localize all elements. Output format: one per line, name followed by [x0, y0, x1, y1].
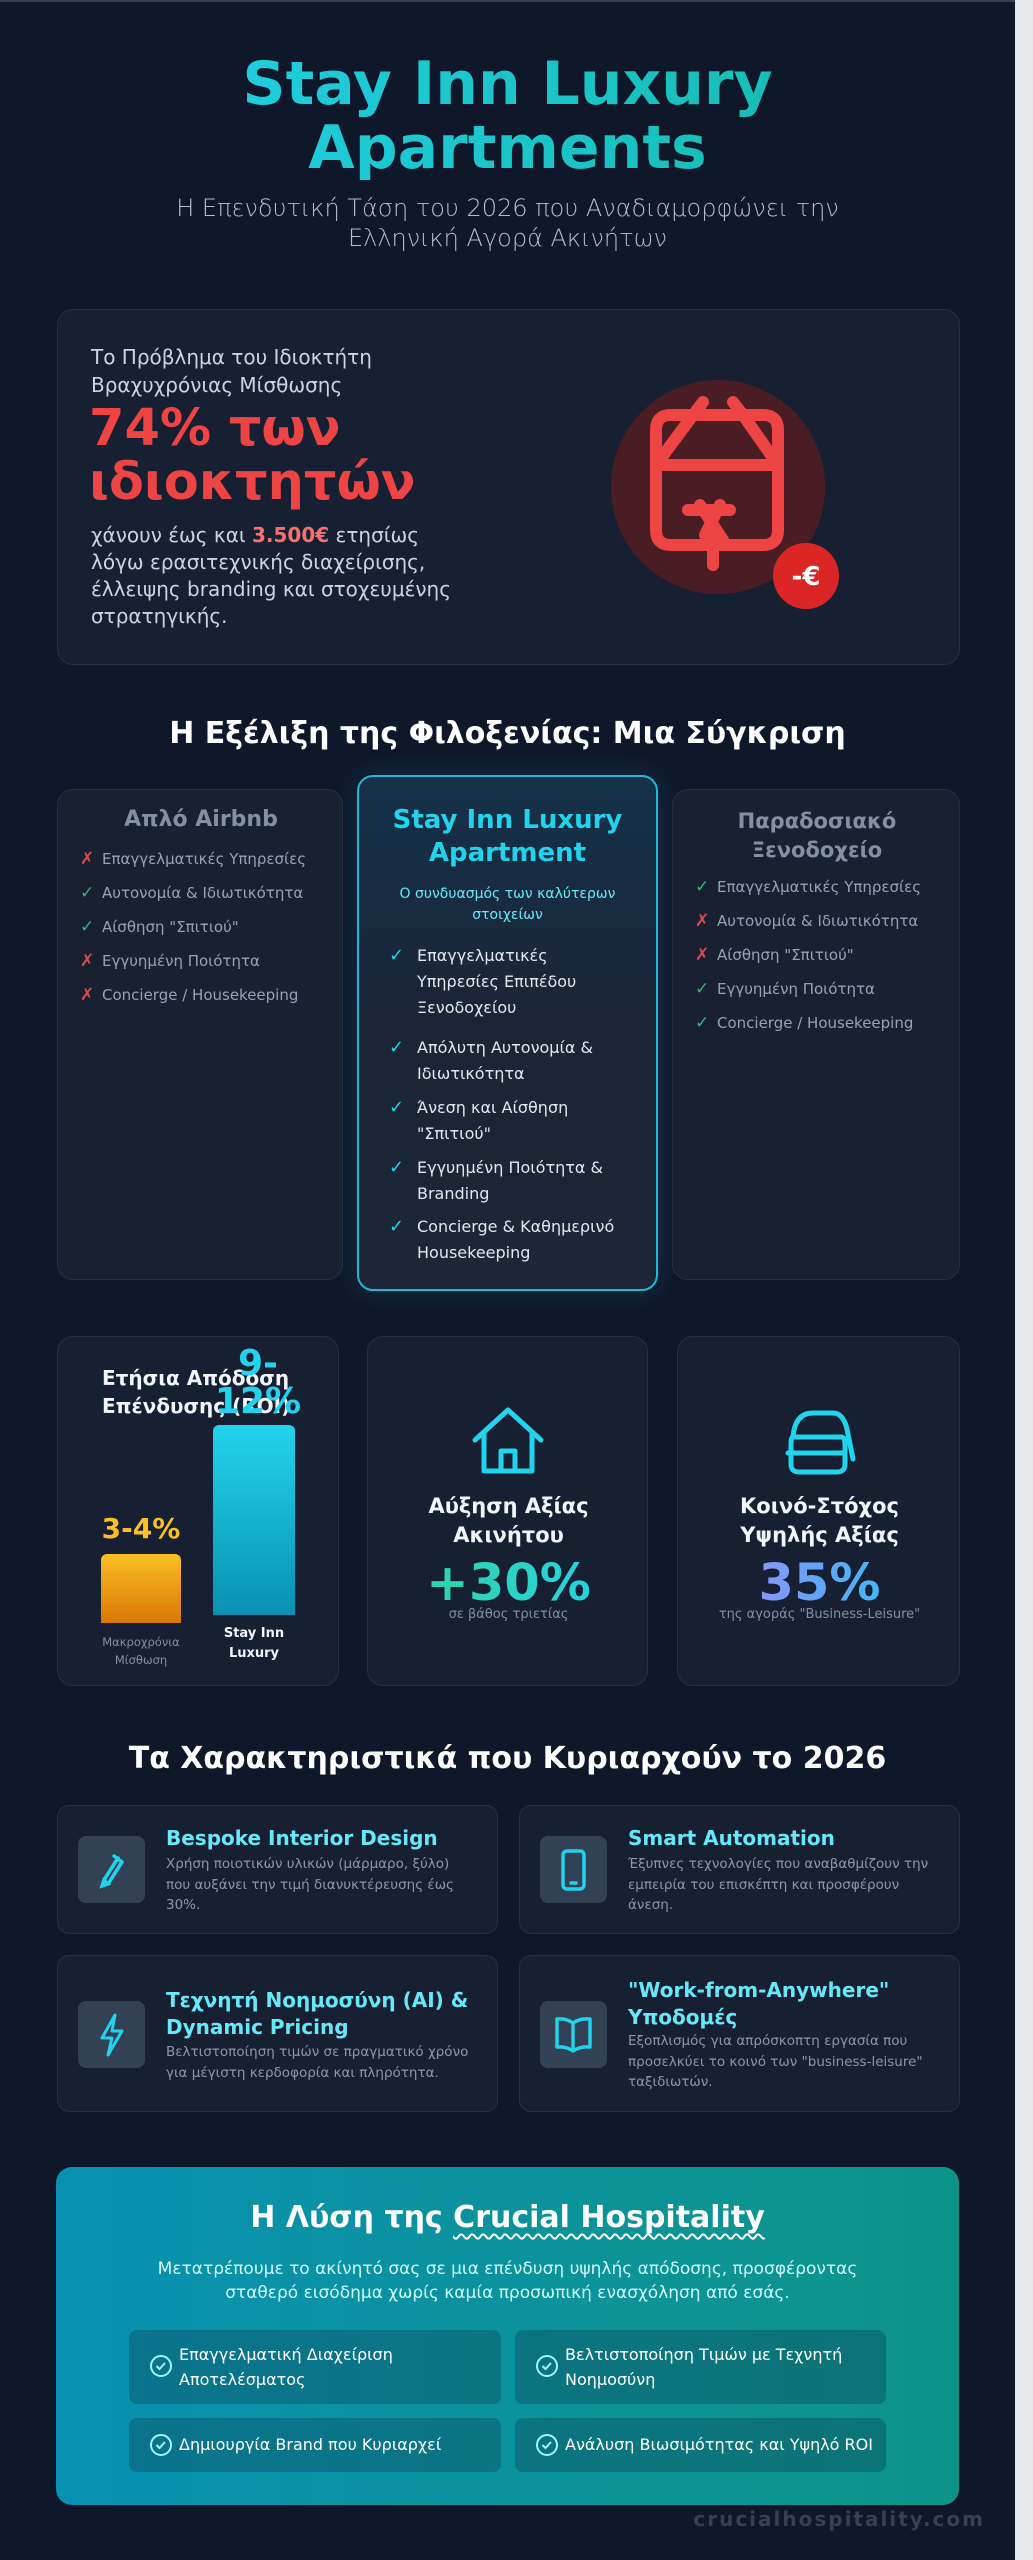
stay inn list: ✓ — [389, 1097, 404, 1118]
stay inn list: Απόλυτη Αυτονομία & — [417, 1038, 593, 1057]
hotel title: Παραδοσιακό — [738, 809, 896, 833]
subtitle — [176, 194, 839, 252]
hotel list: ✗ — [695, 911, 709, 931]
stay inn title: Apartment — [429, 838, 586, 868]
feature: smart automation: εμπειρία του επισκέπτη και προσφέρουν — [628, 1876, 899, 1892]
icon: house — [472, 1407, 544, 1474]
benefit 3 — [129, 2418, 501, 2472]
icon: book — [540, 2001, 607, 2068]
stay inn list: Εγγυημένη Ποιότητα & — [417, 1158, 603, 1177]
airbnb list: ✓ — [80, 883, 94, 903]
hotel list — [695, 877, 921, 1033]
audience caption: της αγοράς "Business-Leisure" — [719, 1607, 920, 1622]
stay inn list: ✓ — [389, 945, 404, 966]
problem text: έλλειψης branding και στοχευμένης — [91, 577, 451, 601]
bar: stay inn — [213, 1343, 301, 1661]
stay inn list: Ξενοδοχείου — [417, 998, 516, 1017]
problem text: λόγω ερασιτεχνικής διαχείρισης, — [91, 550, 425, 574]
feature: work from anywhere: ταξιδιωτών. — [628, 2074, 713, 2090]
feature: bespoke interior: Χρήση ποιοτικών υλικών (μάρμαρο, ξύλο) — [166, 1856, 449, 1872]
benefit 2 — [515, 2330, 886, 2404]
airbnb list: Εγγυημένη Ποιότητα — [102, 952, 260, 970]
title — [0, 52, 1015, 180]
stay inn list: Concierge & Καθημερινό — [417, 1217, 614, 1236]
stay inn subtitle: Ο συνδυασμός των καλύτερων — [400, 886, 615, 902]
hotel list: ✗ — [695, 945, 709, 965]
feature: bespoke interior: 30%. — [166, 1897, 200, 1913]
airbnb list — [80, 849, 306, 1005]
airbnb list: Επαγγελματικές Υπηρεσίες — [102, 850, 306, 868]
benefit 2: Νοημοσύνη — [565, 2370, 655, 2389]
hotel list: ✓ — [695, 877, 709, 897]
hotel list: Αίσθηση "Σπιτιού" — [717, 946, 854, 964]
hotel title — [738, 809, 896, 862]
heading: comparison: Η Εξέλιξη της Φιλοξενίας: Μια Σύγκριση — [169, 716, 846, 751]
audience stat — [678, 1555, 961, 1613]
subtitle: Η Επενδυτική Τάση του 2026 που Αναδιαμορφώνει την — [176, 194, 839, 222]
benefit 1 — [129, 2330, 501, 2404]
icon: calendar loss: -€ — [792, 562, 820, 592]
benefit 2: Βελτιστοποίηση Τιμών με Τεχνητή — [565, 2345, 842, 2364]
value title — [428, 1494, 589, 1547]
stay inn list: Επαγγελματικές — [417, 946, 548, 965]
feature: smart automation: Έξυπνες τεχνολογίες που αναβαθμίζουν την — [628, 1856, 928, 1872]
bar: stay inn: 12% — [215, 1381, 301, 1422]
hotel title: Ξενοδοχείο — [752, 838, 882, 862]
value title: Ακινήτου — [453, 1523, 564, 1547]
value stat — [368, 1555, 649, 1613]
audience title: Υψηλής Αξίας — [740, 1523, 899, 1547]
stay inn subtitle: στοιχείων — [472, 907, 543, 923]
roi title: Ετήσια Απόδοση — [102, 1366, 289, 1390]
hotel list: ✓ — [695, 1013, 709, 1033]
problem text — [91, 523, 451, 628]
feature: work from anywhere: Υποδομές — [628, 2005, 737, 2029]
airbnb list: ✗ — [80, 849, 94, 869]
airbnb list: Concierge / Housekeeping — [102, 986, 298, 1004]
title: Apartments — [308, 113, 707, 183]
airbnb list: ✓ — [80, 917, 94, 937]
stay inn list: Housekeeping — [417, 1243, 530, 1262]
problem text: στρατηγικής. — [91, 604, 227, 628]
panel: ROI chart — [57, 1336, 339, 1686]
icon: calendar loss — [611, 380, 839, 609]
title: Stay Inn Luxury — [242, 49, 773, 119]
feature: work from anywhere — [519, 1955, 960, 2112]
feature: smart automation: άνεση. — [628, 1897, 673, 1913]
big stat — [89, 399, 416, 512]
stay inn list — [389, 945, 614, 1262]
stay inn subtitle — [400, 886, 615, 923]
solution text — [158, 2259, 857, 2303]
stay inn title: Stay Inn Luxury — [393, 805, 622, 835]
feature: work from anywhere: προσελκύει το κοινό των "business-leisure" — [628, 2054, 923, 2070]
subtitle: Ελληνική Αγορά Ακινήτων — [348, 224, 667, 252]
airbnb list: ✗ — [80, 985, 94, 1005]
bar: long-term: 3-4% — [102, 1512, 180, 1545]
solution text: σταθερό εισόδημα χωρίς καμία προσωπική ενασχόληση από εσάς. — [225, 2283, 790, 2303]
bar: stay inn: Luxury — [229, 1646, 279, 1661]
big stat: 74% των — [89, 399, 340, 458]
bar: long-term — [101, 1512, 181, 1667]
value caption: σε βάθος τριετίας — [449, 1607, 568, 1622]
roi title — [102, 1366, 290, 1418]
feature: smart automation — [519, 1805, 960, 1934]
benefit 1: Αποτελέσματος — [179, 2370, 305, 2389]
roi title: Επένδυσης (ROI) — [102, 1394, 290, 1418]
audience title: Κοινό-Στόχος — [740, 1494, 899, 1518]
stay inn list: "Σπιτιού" — [417, 1124, 491, 1143]
panel: solution — [56, 2167, 959, 2505]
airbnb title: Απλό Airbnb — [124, 807, 278, 832]
panel: property value — [367, 1336, 648, 1686]
feature: AI pricing: Τεχνητή Νοημοσύνη (AI) & — [166, 1988, 468, 2012]
solution title: Η Λύση της Crucial Hospitality — [250, 2200, 765, 2235]
feature: smart automation: Smart Automation — [628, 1826, 835, 1850]
benefit 4: Ανάλυση Βιωσιμότητας και Υψηλό ROI — [565, 2435, 873, 2454]
feature: bespoke interior: Bespoke Interior Design — [166, 1826, 438, 1850]
stay inn list: ✓ — [389, 1216, 404, 1237]
icon: luggage — [786, 1410, 856, 1474]
icon: lightning — [78, 2001, 145, 2068]
feature: AI pricing — [57, 1955, 498, 2112]
panel: target audience — [677, 1336, 960, 1686]
bar: stay inn: Stay Inn — [224, 1626, 284, 1641]
value stat: +30% — [426, 1554, 591, 1613]
benefit 4 — [515, 2418, 886, 2472]
hotel list: Αυτονομία & Ιδιωτικότητα — [717, 912, 918, 930]
big stat: ιδιοκτητών — [89, 453, 416, 512]
feature: work from anywhere: Εξοπλισμός για απρόσκοπτη εργασία που — [628, 2033, 907, 2049]
stay inn title — [393, 805, 622, 868]
problem label: Το Πρόβλημα του Ιδιοκτήτη — [91, 345, 372, 369]
problem label — [90, 345, 372, 397]
problem text: χάνουν έως και 3.500€ ετησίως — [91, 523, 419, 547]
icon: phone — [540, 1836, 607, 1903]
hotel list: ✓ — [695, 979, 709, 999]
benefit 1: Επαγγελματική Διαχείριση — [179, 2345, 393, 2364]
panel: traditional hotel — [672, 789, 960, 1280]
solution text: Μετατρέπουμε το ακίνητό σας σε μια επένδυση υψηλής απόδοσης, προσφέροντας — [158, 2259, 857, 2279]
problem label: Βραχυχρόνιας Μίσθωσης — [91, 373, 342, 397]
airbnb list: ✗ — [80, 951, 94, 971]
audience title — [740, 1494, 899, 1547]
stay inn list: ✓ — [389, 1157, 404, 1178]
feature: bespoke interior — [57, 1805, 498, 1934]
panel: simple airbnb — [57, 789, 343, 1280]
panel: problem — [57, 309, 960, 665]
stay inn list: Υπηρεσίες Επιπέδου — [417, 972, 576, 991]
hotel list: Εγγυημένη Ποιότητα — [717, 980, 875, 998]
airbnb list: Αίσθηση "Σπιτιού" — [102, 918, 239, 936]
footer: website: crucialhospitality.com — [693, 2507, 985, 2531]
bar: long-term: Μακροχρόνια — [102, 1635, 180, 1649]
benefit 3: Δημιουργία Brand που Κυριαρχεί — [179, 2435, 441, 2454]
feature: AI pricing: για μέγιστη κερδοφορία και πληρότητα. — [166, 2064, 439, 2080]
hotel list: Επαγγελματικές Υπηρεσίες — [717, 878, 921, 896]
stay inn list: Branding — [417, 1184, 489, 1203]
feature: work from anywhere: "Work-from-Anywhere" — [628, 1978, 889, 2002]
hotel list: Concierge / Housekeeping — [717, 1014, 913, 1032]
value title: Αύξηση Αξίας — [428, 1494, 589, 1518]
feature: bespoke interior: που αυξάνει την τιμή διανυκτέρευσης έως — [166, 1876, 454, 1892]
icon: brush — [78, 1836, 145, 1903]
heading: features: Τα Χαρακτηριστικά που Κυριαρχούν το 2026 — [129, 1741, 886, 1776]
bar: long-term: Μίσθωση — [115, 1653, 167, 1667]
stay inn list: Άνεση και Αίσθηση — [417, 1098, 568, 1117]
airbnb list: Αυτονομία & Ιδιωτικότητα — [102, 884, 303, 902]
stay inn list: Ιδιωτικότητα — [417, 1064, 525, 1083]
bar: stay inn: 9- — [238, 1343, 278, 1384]
audience stat: 35% — [758, 1554, 881, 1613]
stay inn list: ✓ — [389, 1037, 404, 1058]
feature: AI pricing: Βελτιστοποίηση τιμών σε πραγματικό χρόνο — [166, 2044, 468, 2060]
feature: AI pricing: Dynamic Pricing — [166, 2015, 349, 2039]
panel: stay inn luxury — [357, 775, 658, 1291]
